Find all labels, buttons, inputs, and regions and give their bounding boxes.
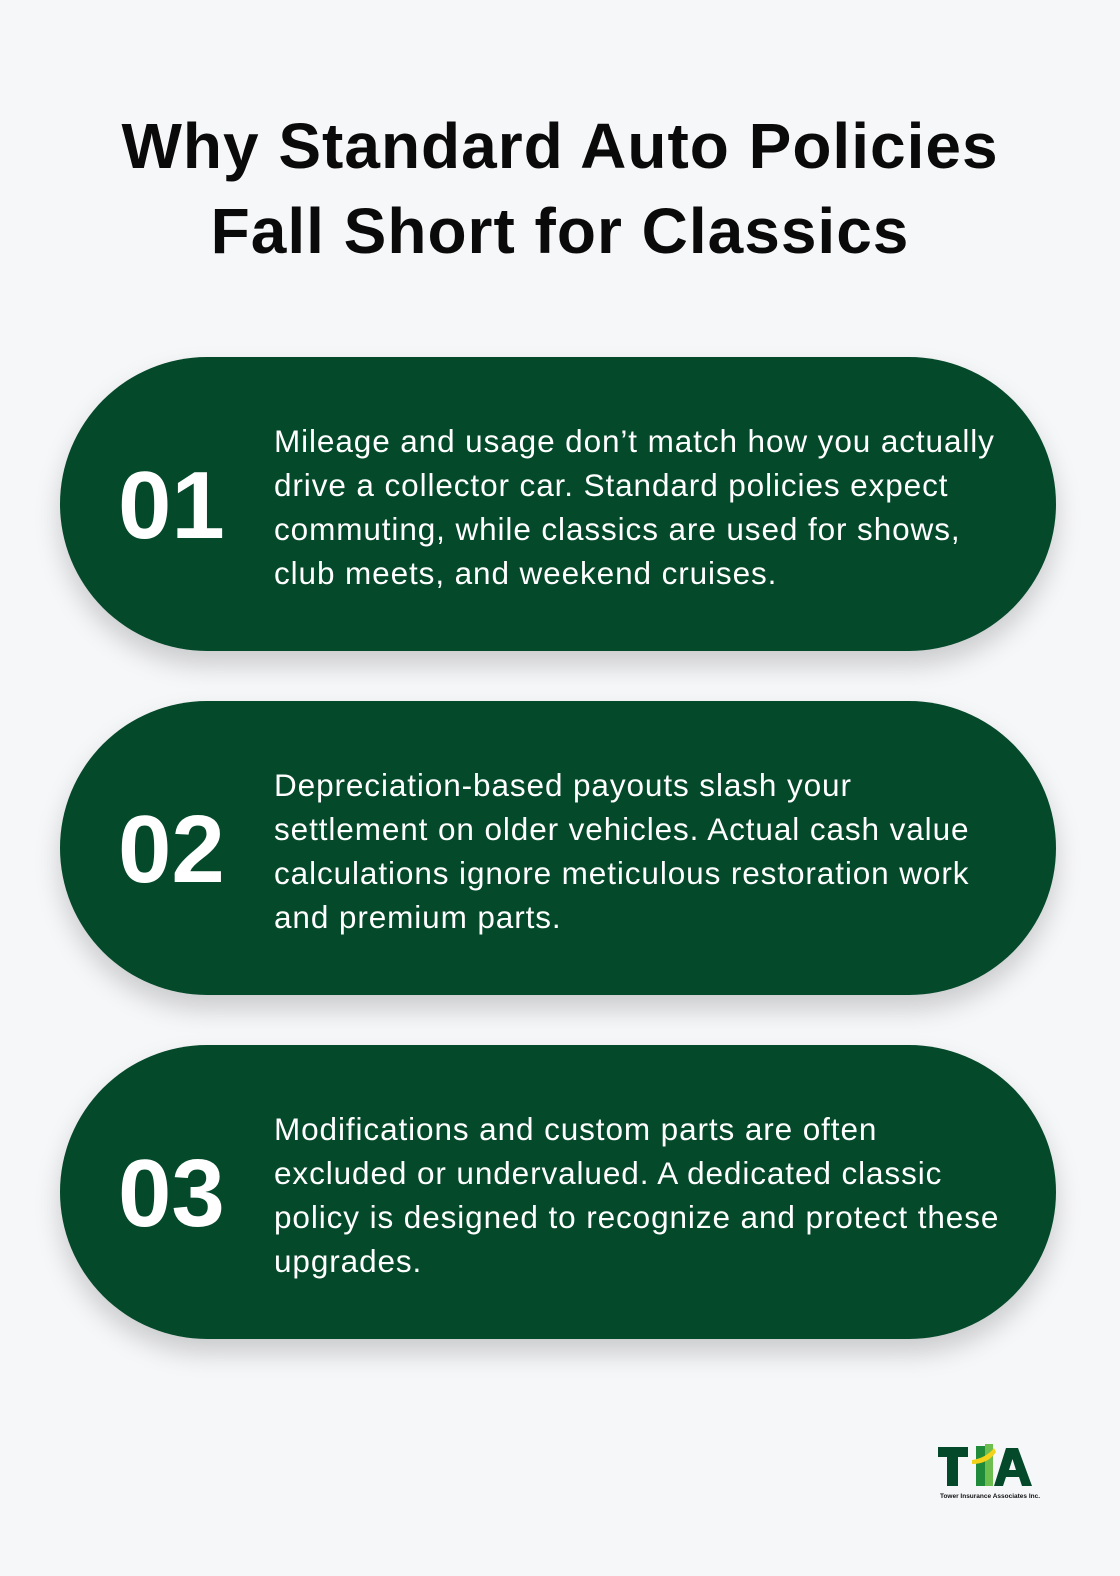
text 03 xyxy=(274,1111,999,1279)
text 02: calculations ignore meticulous restoration work xyxy=(274,855,969,891)
number 02: 02 xyxy=(118,796,225,903)
logo xyxy=(938,1444,1040,1500)
panel: 01 xyxy=(60,357,1056,651)
text 01: Mileage and usage don’t match how you actually xyxy=(274,423,995,459)
number 03: 03 xyxy=(118,1140,225,1247)
text 02: and premium parts. xyxy=(274,899,562,935)
text 03: upgrades. xyxy=(274,1243,422,1279)
text 02: Depreciation-based payouts slash your xyxy=(274,767,852,803)
text 01 xyxy=(274,423,995,591)
text 02: settlement on older vehicles. Actual cash value xyxy=(274,811,969,847)
text 01: club meets, and weekend cruises. xyxy=(274,555,777,591)
logo: Tower Insurance Associates Inc. xyxy=(940,1493,1040,1500)
text 03: Modifications and custom parts are often xyxy=(274,1111,877,1147)
text 01: drive a collector car. Standard policies expect xyxy=(274,467,948,503)
text 03: excluded or undervalued. A dedicated classic xyxy=(274,1155,942,1191)
text 02 xyxy=(274,767,969,935)
panel: 03 xyxy=(60,1045,1056,1339)
number 01: 01 xyxy=(118,452,225,559)
title: Why Standard Auto Policies xyxy=(121,110,999,182)
text 03: policy is designed to recognize and protect these xyxy=(274,1199,999,1235)
title: Fall Short for Classics xyxy=(211,195,909,267)
panel: 02 xyxy=(60,701,1056,995)
text 01: commuting, while classics are used for shows, xyxy=(274,511,960,547)
title xyxy=(121,110,999,267)
